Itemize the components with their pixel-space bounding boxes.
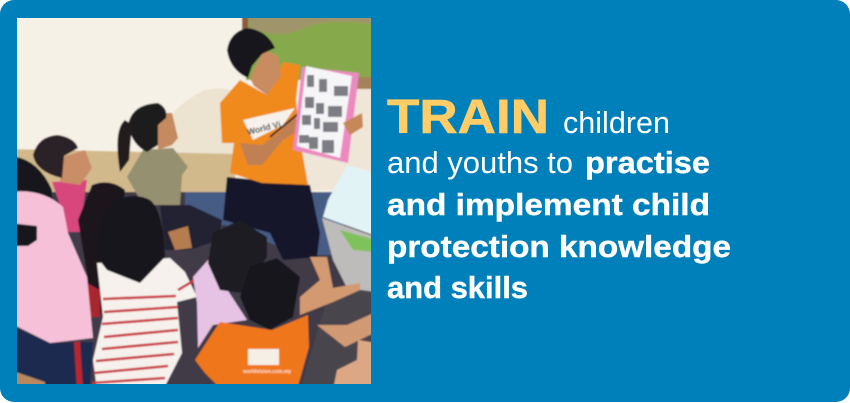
wall — [17, 18, 334, 194]
line: and implement child: and implement child — [387, 187, 710, 222]
wooden post and ledge — [241, 18, 371, 90]
logo text: World Vi — [246, 119, 282, 137]
shirt — [220, 62, 308, 185]
hair — [227, 28, 275, 78]
child with ponytail — [117, 103, 222, 250]
text block: headline message — [387, 91, 731, 305]
shirt logo patch — [243, 108, 295, 140]
line: and skills: and skills — [387, 270, 528, 305]
grass — [245, 18, 371, 81]
line: protection knowledge: protection knowledge — [387, 229, 731, 264]
face and neck — [250, 50, 281, 95]
paper on right, container — [322, 165, 376, 292]
child in pink jacket — [10, 191, 93, 390]
feet — [300, 257, 376, 390]
photo: trainer showing a picture sheet to children — [10, 10, 380, 392]
trainer — [220, 28, 363, 260]
child in orange shirt: worldvision.com.my — [242, 369, 291, 375]
floor — [303, 89, 371, 190]
sheet drawings — [299, 75, 348, 153]
word: practise: practise — [585, 145, 710, 180]
dark-haired child behind — [78, 182, 125, 317]
word: TRAIN: TRAIN — [387, 91, 549, 144]
child at far left hair — [17, 156, 53, 198]
child in orange shirt — [195, 258, 309, 390]
mat — [10, 192, 380, 392]
arm — [240, 118, 297, 166]
wall base — [10, 149, 235, 195]
child in lilac shirt — [193, 220, 267, 348]
word: children: children — [563, 105, 670, 140]
line: and youths to: and youths to — [387, 145, 573, 180]
pen — [268, 113, 298, 138]
trousers — [223, 177, 320, 260]
picture sheet — [293, 67, 359, 163]
right hand — [343, 113, 363, 135]
girl in pink collar — [33, 135, 92, 232]
child in striped shirt — [92, 196, 197, 390]
